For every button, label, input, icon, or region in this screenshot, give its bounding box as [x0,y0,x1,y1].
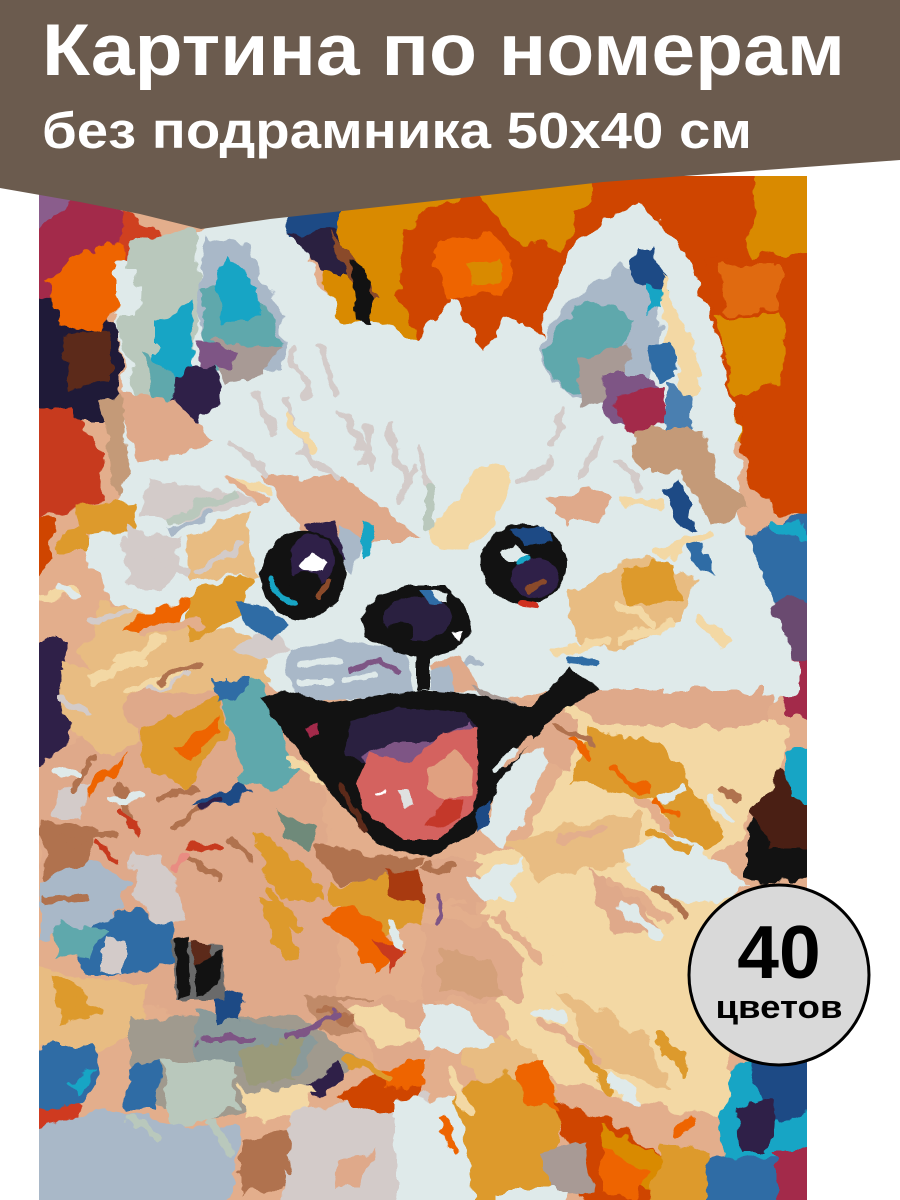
fur brush strokes [40,345,740,1170]
left ear colours [120,228,200,400]
muzzle fur [232,633,518,706]
dog tongue [357,727,478,840]
background top left [39,194,70,229]
badge: 40 colours [689,885,869,1065]
dog nose [360,585,472,690]
blue patch and small eye [39,860,130,940]
painted fur and background layers [39,176,807,1200]
background bottom right [718,1061,807,1160]
right ear colours [535,262,665,400]
header banner [0,0,900,229]
title: Картина по номерам [42,10,845,91]
grey-green band [130,1015,360,1120]
badge: 40 colours: 40 [737,910,821,994]
dog right eye [481,524,567,605]
amber patch lower left [39,966,148,1052]
dog mouth [260,660,600,857]
dog head white [80,200,800,705]
upper fur tones left and right of face [78,500,137,535]
orange cluster under mouth [325,875,425,935]
orange fur bottom right [456,1070,560,1200]
badge: 40 colours: цветов [716,989,842,1025]
white fur patches lower [485,745,550,850]
small dog eye in lower left fur [172,936,225,1000]
painting: pomeranian dog [39,176,807,1200]
lower right cream fur [473,850,730,1120]
dark patch between ears [285,211,380,326]
dog face details [172,520,600,1000]
background top right [320,176,807,442]
background right middle [738,440,807,518]
dog left eye [235,520,375,640]
left lower fur [76,600,272,696]
left side red and mixed fur [39,407,106,518]
amber fur right of mouth [514,704,790,860]
subtitle: без подрамника 50х40 см [42,102,752,159]
